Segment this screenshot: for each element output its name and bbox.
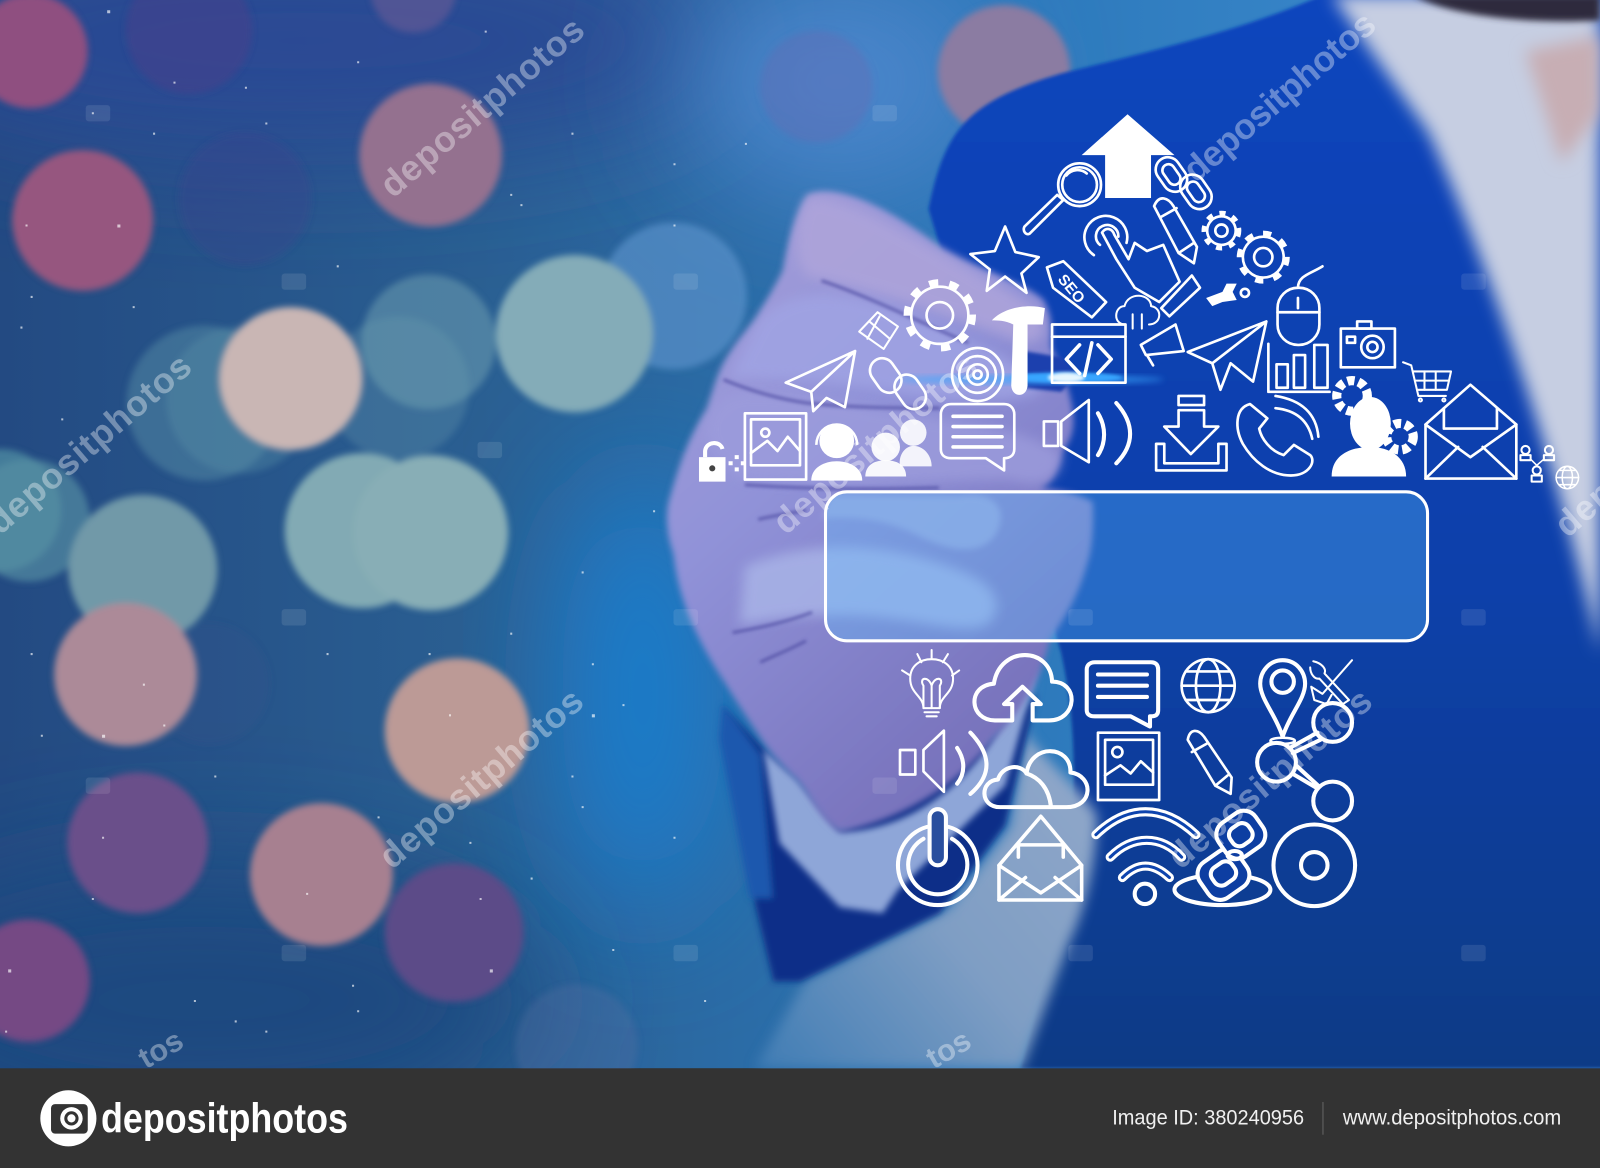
- icon: power button: [898, 809, 978, 905]
- watermarks: depositphotos: [1175, 4, 1383, 190]
- icon: shopping cart: [1403, 362, 1451, 402]
- icon: up arrow: [1082, 114, 1174, 198]
- finger: fifth: [740, 547, 996, 628]
- hand: [667, 191, 1093, 832]
- icon: disc: [1273, 824, 1355, 906]
- icon: photo frame: [1098, 733, 1159, 800]
- icon group: upper house row: [699, 381, 1579, 489]
- watermarks: tos: [132, 1023, 189, 1075]
- footer logo: [40, 1090, 348, 1146]
- icon: globe: [1182, 659, 1235, 712]
- icon: unlocked padlock: [699, 443, 745, 482]
- icon: chat bubble: [941, 404, 1014, 470]
- icon: hammer: [992, 306, 1045, 395]
- watermarks: depositphotos: [1160, 680, 1380, 876]
- central text box: [826, 492, 1428, 641]
- finger: fourth: [821, 495, 1001, 549]
- icon: message bubble: [1087, 662, 1158, 727]
- icon: SEO tag: [1047, 261, 1106, 317]
- shirt: [1332, 0, 1600, 653]
- icon: cloud upload: [974, 655, 1072, 720]
- icon: share nodes: [1257, 703, 1352, 820]
- icon: wrench: [1206, 284, 1249, 306]
- icon: tools: [1310, 660, 1352, 704]
- icon: bar chart: [1268, 344, 1330, 392]
- finger: middle: [730, 295, 1041, 401]
- icon: mouse: [1278, 266, 1322, 345]
- icon: broken chain with shadow: [1174, 805, 1271, 906]
- collar shadow: [1413, 0, 1600, 21]
- icon: chain link: [1151, 152, 1216, 214]
- icon: user with gears: [1332, 381, 1413, 477]
- icon: double cloud: [984, 751, 1088, 807]
- icon: puzzle grid: [859, 312, 898, 349]
- icon: phone: [1237, 396, 1318, 476]
- icon: small gear: [1204, 213, 1239, 248]
- jacket sleeve: [719, 694, 1037, 982]
- watermarks: depositphotos: [372, 9, 592, 205]
- icon: speaker lower: [900, 731, 986, 794]
- icon: network of people: [1520, 446, 1554, 482]
- shirt cuff: [763, 664, 1039, 913]
- website url: www.depositphotos.com: [1342, 1105, 1561, 1129]
- icon: speaker: [1044, 400, 1130, 463]
- icon: cloud sync small: [1116, 296, 1159, 329]
- icon: code window: [1052, 324, 1126, 383]
- icon: envelope: [999, 816, 1082, 900]
- icon: target: [952, 348, 1003, 401]
- icon: picture frame: [745, 413, 806, 480]
- watermark camera marks: [86, 105, 1486, 961]
- suit jacket: [929, 0, 1600, 1068]
- icon group: upper house roof: [786, 114, 1451, 414]
- finger creases: [723, 281, 968, 662]
- watermarks: tos: [920, 1023, 977, 1075]
- dust speckles: [5, 10, 747, 1033]
- finger: index: [797, 199, 1044, 343]
- icon: download: [1156, 396, 1227, 470]
- footer logo: depositphotos: [101, 1095, 348, 1142]
- pen tip with glow: [898, 351, 1163, 392]
- icon: SEO tag: SEO: [1054, 271, 1088, 307]
- icon: large gear: [1240, 234, 1287, 281]
- footer bar: [0, 1068, 1600, 1168]
- icon: chain link left: [865, 353, 931, 414]
- watermarks: depositphotos: [371, 680, 591, 876]
- neck: [1526, 36, 1600, 163]
- icon: open envelope: [1426, 385, 1516, 479]
- icon: star: [970, 227, 1039, 293]
- icon: camera: [1341, 321, 1395, 367]
- icon: paper plane left: [786, 351, 855, 411]
- icon: tapping hand: [1084, 216, 1200, 316]
- icon: map pin: [1260, 660, 1305, 744]
- icon: support agents: [811, 419, 932, 481]
- image id: Image ID: 380240956: [1112, 1105, 1304, 1129]
- icon group: lower house: [898, 650, 1355, 906]
- watermarks: depositphotos: [765, 346, 985, 542]
- icon: wifi: [1096, 812, 1196, 904]
- icon: megaphone: [1141, 324, 1184, 365]
- icon: small globe: [1556, 466, 1579, 489]
- icon: pencil lower: [1188, 731, 1232, 794]
- finger: ring: [706, 391, 1061, 484]
- icon: pencil: [1154, 198, 1197, 263]
- bokeh lights: [0, 0, 1070, 1107]
- icon: magnifier: [1024, 163, 1101, 234]
- icon: light bulb: [902, 650, 959, 716]
- pale lower front: [753, 728, 1106, 1068]
- icon: gear outline: [907, 283, 972, 348]
- icon: paper plane right: [1188, 321, 1266, 390]
